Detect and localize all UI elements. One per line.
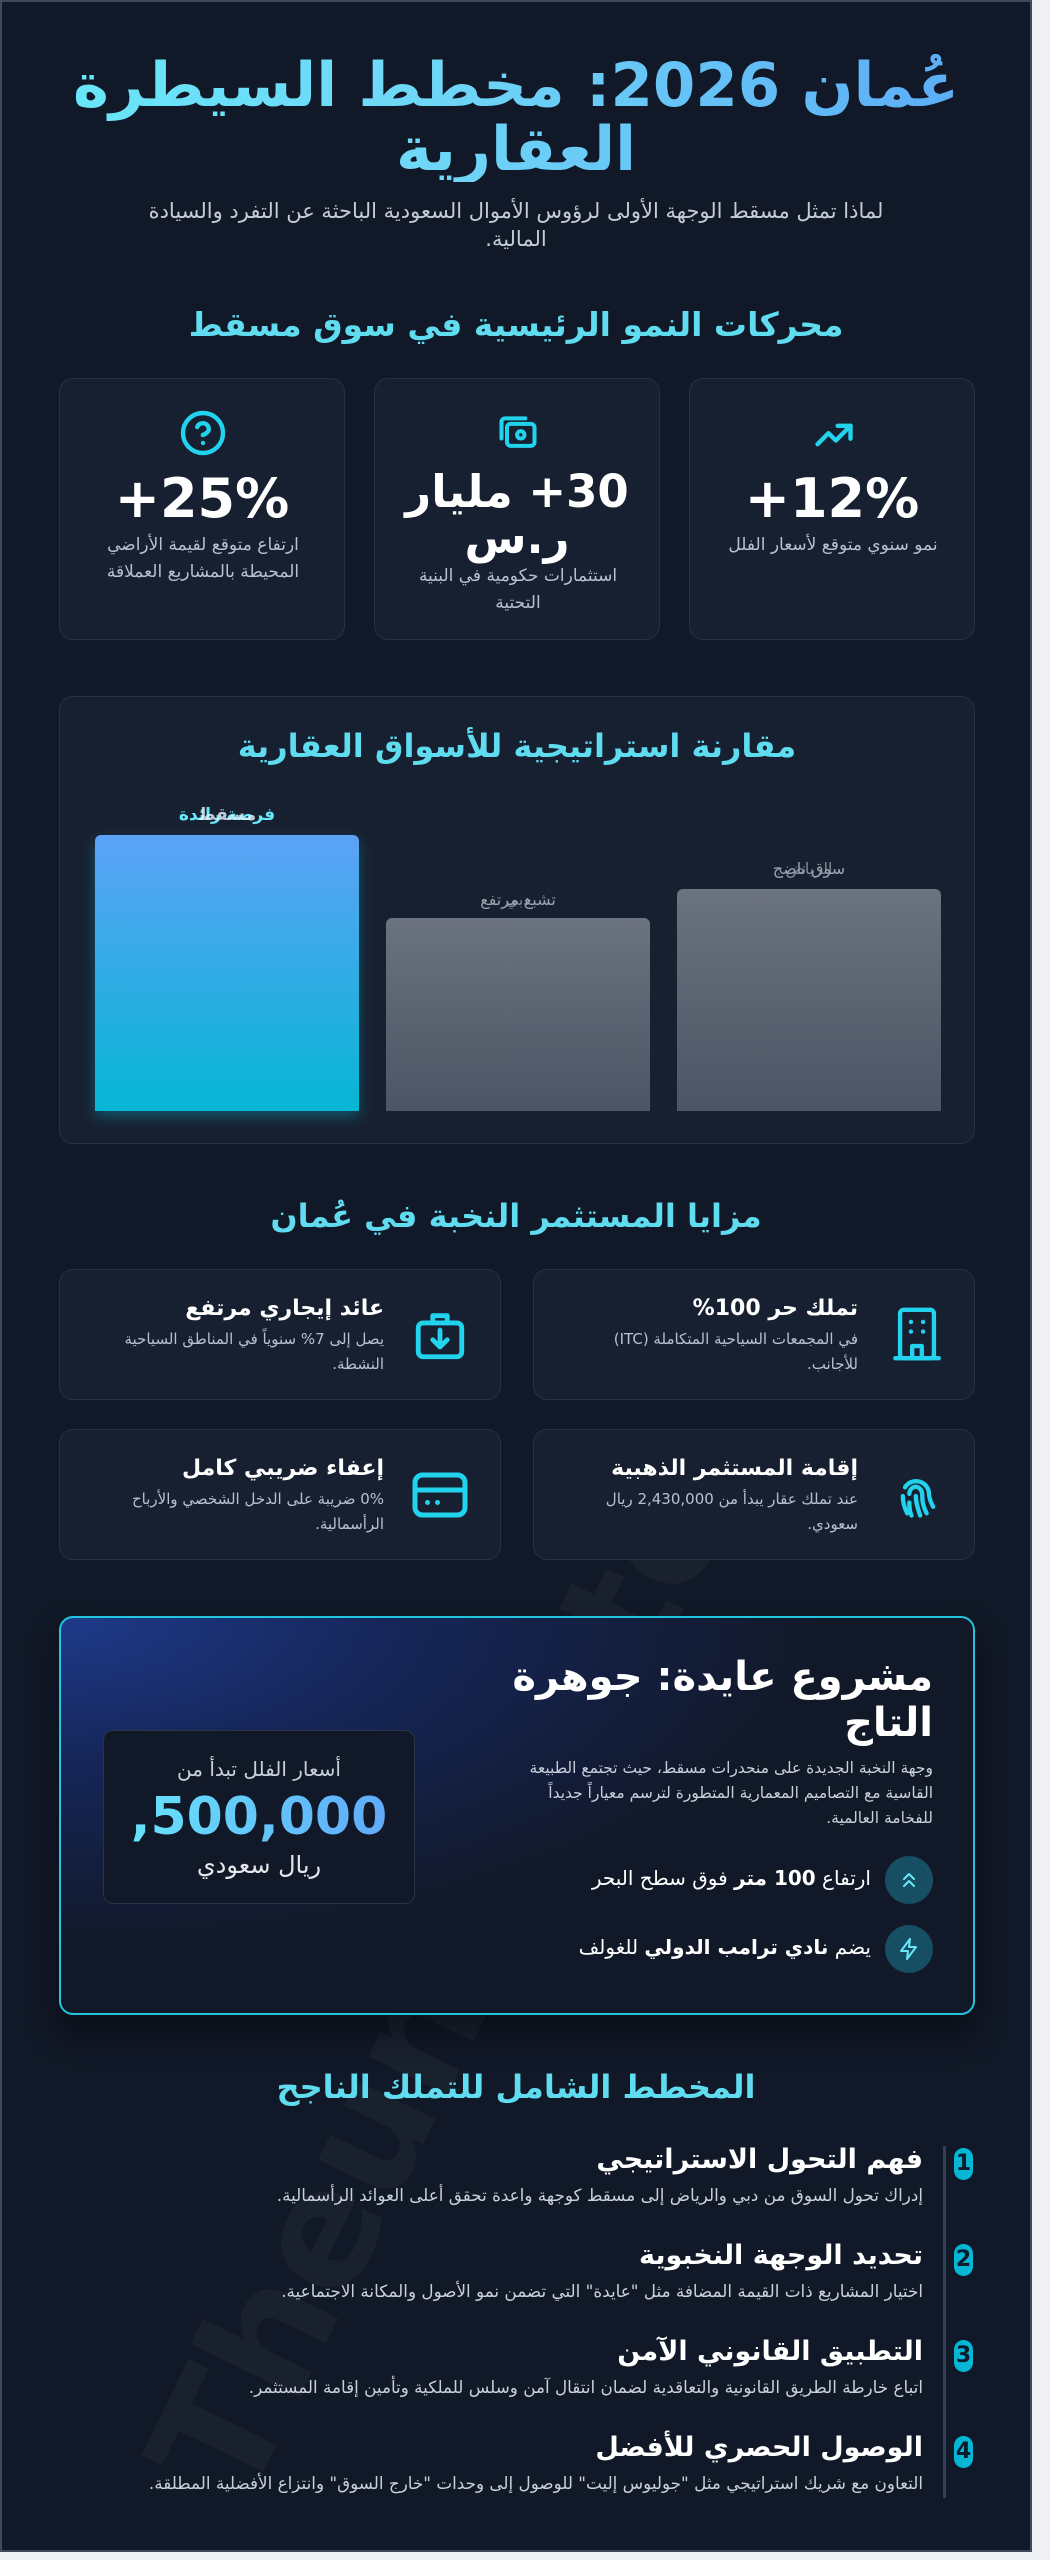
bar: dubai bbox=[386, 890, 650, 1111]
card: 30 billion bbox=[374, 378, 660, 640]
step 4: 4 bbox=[956, 2439, 971, 2464]
card: rental yield: عائد إيجاري مرتفع bbox=[185, 1296, 384, 1321]
callout: price: ريال سعودي bbox=[197, 1851, 321, 1879]
bar: riyadh: سوق ناضج bbox=[773, 859, 845, 878]
bar: dubai: تشبع مرتفع bbox=[480, 890, 556, 909]
icon: trend up bbox=[815, 424, 853, 446]
step 1 bbox=[277, 2144, 973, 2206]
card: 12%: 12%+ bbox=[745, 467, 919, 530]
bar: dubai: دبي bbox=[506, 890, 530, 909]
card: tax exemption: إعفاء ضريبي كامل bbox=[182, 1456, 384, 1481]
card: 25% bbox=[59, 378, 345, 640]
icon: building bbox=[893, 1308, 941, 1360]
step 3: 3 bbox=[956, 2343, 971, 2368]
step 4: التعاون مع شريك استراتيجي مثل "جوليوس إليت" للوصول إلى وحدات "خارج السوق" وانتزاع الأفضلية المطلقة. bbox=[149, 2473, 923, 2493]
text: description: القاسية مع التصاميم المعمارية المتطورة لترسم معياراً جديداً bbox=[548, 1784, 933, 1802]
step 2: اختيار المشاريع ذات القيمة المضافة مثل "عايدة" التي تضمن نمو الأصول والمكانة الاجتماعية. bbox=[281, 2281, 923, 2301]
text: description: للفخامة العالمية. bbox=[826, 1809, 933, 1827]
step 4: الوصول الحصري للأفضل bbox=[595, 2432, 923, 2463]
card: 30 billion: استثمارات حكومية في البنية التحتية bbox=[419, 566, 617, 613]
step 1: 1 bbox=[956, 2151, 971, 2176]
panel: benefits grid bbox=[59, 1269, 975, 1560]
bar: muscat: مسقط bbox=[198, 805, 256, 825]
card: freehold: تملك حر 100% bbox=[693, 1296, 858, 1321]
step 2 bbox=[281, 2240, 973, 2301]
heading: roadmap: المخطط الشامل للتملك الناجح bbox=[277, 2068, 755, 2106]
bullet: altitude bbox=[591, 1856, 933, 1904]
step 1: إدراك تحول السوق من دبي والرياض إلى مسقط كوجهة واعدة تحقق أعلى العوائد الرأسمالية. bbox=[277, 2185, 923, 2205]
bullet: golf: يضم نادي ترامب الدولي للغولف bbox=[579, 1935, 871, 1959]
bar: muscat bbox=[88, 805, 366, 1124]
title: Aida: مشروع عايدة: جوهرة التاج bbox=[512, 1654, 933, 1746]
card: 25%: 25%+ bbox=[115, 467, 289, 530]
text: description: وجهة النخبة الجديدة على منحدرات مسقط، حيث تجتمع الطبيعة bbox=[530, 1759, 933, 1777]
title: عُمان 2026: مخطط السيطرة العقارية bbox=[73, 50, 959, 185]
step 3: التطبيق القانوني الآمن bbox=[617, 2336, 923, 2367]
step 3 bbox=[249, 2336, 973, 2398]
icon: money bbox=[500, 416, 536, 448]
card: tax exemption bbox=[59, 1429, 501, 1560]
icon: fingerprint bbox=[900, 1479, 936, 1518]
callout: price bbox=[103, 1730, 415, 1904]
card: 25%: ارتفاع متوقع لقيمة الأراضي المحيطة بالمشاريع العملاقة bbox=[107, 535, 299, 582]
card: 12% bbox=[689, 378, 975, 640]
card: freehold: في المجمعات السياحية المتكاملة (ITC) للأجانب. bbox=[614, 1330, 858, 1373]
bullet: golf bbox=[579, 1925, 933, 1973]
text: description bbox=[530, 1759, 933, 1827]
panel: Aida project bbox=[59, 1616, 975, 2015]
card: golden residency bbox=[533, 1429, 975, 1560]
icon: download box bbox=[416, 1313, 464, 1360]
card: rental yield bbox=[59, 1269, 501, 1400]
subtitle: لماذا تمثل مسقط الوجهة الأولى لرؤوس الأموال السعودية الباحثة عن التفرد والسيادة المالية. bbox=[149, 199, 883, 251]
card: freehold bbox=[533, 1269, 975, 1400]
bar: riyadh bbox=[677, 859, 941, 1111]
panel: market comparison chart bbox=[59, 696, 975, 1144]
step 2: تحديد الوجهة النخبوية bbox=[639, 2240, 923, 2271]
step 3: اتباع خارطة الطريق القانونية والتعاقدية لضمان انتقال آمن وسلس للملكية وتأمين إقامة المستثمر. bbox=[249, 2377, 923, 2397]
card: tax exemption: 0% ضريبة على الدخل الشخصي والأرباح الرأسمالية. bbox=[132, 1490, 384, 1533]
bullet: altitude: ارتفاع 100 متر فوق سطح البحر bbox=[592, 1866, 871, 1890]
heading: chart title: مقارنة استراتيجية للأسواق العقارية bbox=[238, 727, 796, 765]
callout: price: ,500,000 bbox=[131, 1787, 387, 1847]
bar: riyadh: الرياض bbox=[786, 859, 832, 878]
panel: growth cards bbox=[59, 378, 975, 640]
icon: question bbox=[180, 410, 226, 456]
card: 12%: نمو سنوي متوقع لأسعار الفلل bbox=[728, 535, 938, 555]
icon: card bbox=[412, 1472, 468, 1518]
step 1: فهم التحول الاستراتيجي bbox=[596, 2144, 923, 2175]
card: 30 billion: 30+ مليار ر.س bbox=[405, 465, 629, 564]
callout: price: أسعار الفلل تبدأ من bbox=[177, 1757, 341, 1781]
card: golden residency: إقامة المستثمر الذهبية bbox=[611, 1456, 858, 1481]
bar: muscat: فرصة رائدة bbox=[179, 805, 275, 825]
heading: growth drivers: محركات النمو الرئيسية في سوق مسقط bbox=[189, 305, 843, 344]
panel: roadmap steps bbox=[149, 2144, 973, 2498]
heading: elite investor benefits: مزايا المستثمر النخبة في عُمان bbox=[270, 1197, 762, 1235]
card: golden residency: عند تملك عقار يبدأ من 2,430,000 ريال سعودي. bbox=[606, 1490, 858, 1533]
step 4 bbox=[149, 2430, 973, 2494]
text: Theunisolite. bbox=[112, 1386, 795, 2524]
step 2: 2 bbox=[956, 2247, 971, 2272]
card: rental yield: يصل إلى 7% سنوياً في المناطق السياحية النشطة. bbox=[125, 1330, 384, 1373]
